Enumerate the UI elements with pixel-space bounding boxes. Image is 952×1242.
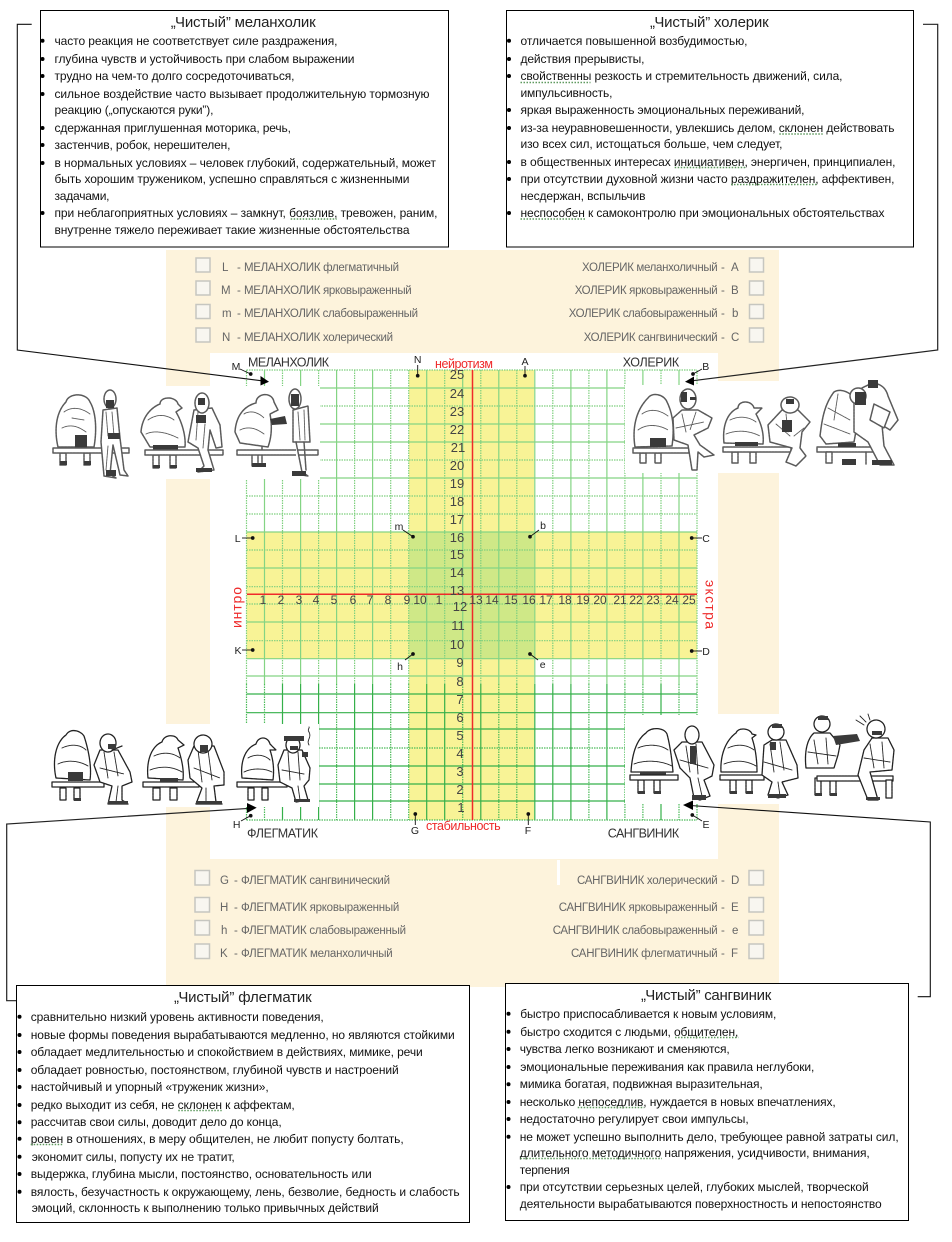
green overlap square [409, 532, 534, 659]
melancholic trait list [40, 34, 438, 237]
sanguine trait list: деятельности вырабатываются поверхностность и непостоянство [520, 1197, 882, 1211]
legend: choleric types: ХОЛЕРИК слабовыраженный [569, 308, 718, 320]
white cut-out behind illustrations, bottom right [625, 714, 900, 804]
chart point letters: N [414, 354, 421, 366]
phlegmatic trait list: эмоций, склонность к выполнению только привычных действий [32, 1201, 379, 1215]
legend: choleric types: - [721, 332, 725, 344]
legend: melancholic types: МЕЛАНХОЛИК ярковыраженный [244, 285, 412, 297]
quadrant title: melancholic: МЕЛАНХОЛИК [248, 356, 330, 370]
red axis lines [247, 370, 697, 820]
melancholic trait list: часто реакция не соответствует силе раздражения, [54, 34, 338, 48]
vertical scale numbers: 20 [450, 458, 464, 473]
legend: sanguine types: F [731, 948, 738, 960]
vertical scale numbers: 14 [450, 565, 464, 580]
choleric trait list: изо всех сил, истощаться больше, чем следует, [520, 137, 782, 151]
sanguine trait list: быстро сходится с людьми, общителен, [520, 1025, 738, 1039]
legend: phlegmatic types: ФЛЕГМАТИК сангвинический [241, 875, 390, 887]
sanguine trait list: мимика богатая, подвижная выразительная, [520, 1077, 763, 1091]
vertical scale numbers: 3 [456, 764, 464, 779]
legend: melancholic types: - [237, 332, 241, 344]
sanguine trait list: длительного методичного напряжения, усидчивости, внимания, [520, 1146, 870, 1160]
horizontal scale numbers: 2 [278, 593, 285, 607]
legend: sanguine types [553, 870, 764, 960]
beige backdrop panel [166, 250, 779, 987]
illustration: melancholic, scene 2 [141, 393, 223, 472]
horizontal scale numbers: 21 [613, 593, 627, 607]
chart point letters: E [702, 819, 710, 831]
legend: sanguine types: e [732, 925, 738, 937]
phlegmatic trait list: выдержка, глубина мысли, постоянство, основательность или [31, 1167, 372, 1181]
white chart panel [210, 353, 718, 859]
legend: sanguine types: САНГВИНИК холерический [577, 875, 718, 887]
chart point markers [240, 365, 702, 825]
legend: sanguine types: САНГВИНИК ярковыраженный [559, 902, 718, 914]
temperament chart grid [246, 370, 697, 820]
legend: choleric types: - [721, 308, 725, 320]
illustration: melancholic, scene 1 [53, 390, 129, 478]
horizontal scale numbers: 7 [367, 593, 374, 607]
heading: melancholic: „Чистый” меланхолик [171, 14, 316, 31]
vertical scale numbers: 11 [451, 618, 465, 633]
vertical scale numbers: 19 [450, 476, 464, 491]
legend: sanguine types: E [731, 902, 739, 914]
horizontal scale numbers: 4 [313, 593, 320, 607]
melancholic trait list: быть хорошим тружеником, успешно справляться с жизненными [54, 172, 410, 186]
chart point letters: L [235, 533, 241, 545]
choleric trait list: неспособен к самоконтролю при эмоциональных обстоятельствах [520, 206, 884, 220]
melancholic trait list: застенчив, робок, нерешителен, [54, 138, 230, 152]
illustration: sanguine, scene 12 [805, 714, 894, 800]
axis label: extra: экстра [702, 580, 718, 629]
vertical scale numbers: 5 [456, 728, 464, 743]
legend: sanguine types: - [721, 875, 725, 887]
illustration: phlegmatic, scene 9 [237, 727, 310, 802]
vertical scale numbers: 16 [450, 530, 464, 545]
legend: choleric types: C [731, 332, 739, 344]
chart point letters: D [702, 646, 710, 658]
melancholic trait list: сильное воздействие часто вызывает продолжительную тормозную [54, 87, 430, 101]
illustration: melancholic, scene 3 [235, 389, 318, 476]
horizontal scale numbers: 13 [469, 593, 483, 607]
illustration: choleric, scene 4 [633, 389, 714, 470]
vertical scale numbers [450, 367, 467, 815]
white cut-out behind illustrations, top left [50, 386, 320, 479]
legend: melancholic types: m [222, 308, 232, 320]
horizontal scale numbers: 18 [558, 593, 572, 607]
legend: sanguine types: D [731, 875, 739, 887]
legend: choleric types: ХОЛЕРИК сангвинический [584, 332, 718, 344]
sanguine trait list [506, 1007, 899, 1211]
legend: choleric types: b [732, 308, 738, 320]
legend: sanguine types: САНГВИНИК флегматичный [571, 948, 718, 960]
arrow: sanguine box to chart [683, 800, 930, 997]
vertical scale numbers: 10 [450, 637, 464, 652]
vertical scale numbers: 24 [450, 386, 464, 401]
melancholic trait list: в нормальных условиях – человек глубокий, содержательный, может [54, 156, 436, 170]
legend: melancholic types: L [222, 262, 229, 274]
illustration: sanguine, scene 10 [630, 726, 714, 800]
legend: phlegmatic types [195, 870, 406, 960]
legend: melancholic types: - [237, 308, 241, 320]
yellow vertical band [409, 370, 534, 820]
quadrant title: phlegmatic: ФЛЕГМАТИК [247, 826, 319, 840]
axis label: stability: стабильность [426, 819, 501, 833]
sanguine trait list: несколько непоседлив, нуждается в новых впечатлениях, [520, 1095, 836, 1109]
melancholic trait list: при неблагоприятных условиях – замкнут, боязлив, тревожен, раним, [54, 206, 438, 220]
legend: sanguine types: - [721, 925, 725, 937]
arrow: phlegmatic box to chart [7, 803, 257, 1001]
vertical scale numbers: 13 [450, 583, 464, 598]
chart point letters: G [411, 825, 419, 837]
legend: sanguine types: - [721, 948, 725, 960]
legend: melancholic types: - [237, 285, 241, 297]
phlegmatic trait list: обладает медлительностью и спокойствием в действиях, мимике, речи [31, 1045, 423, 1059]
melancholic trait list: внутренне тяжело переживает такие жизненные обстоятельства [54, 223, 410, 237]
choleric trait list: яркая выраженность эмоциональных переживаний, [520, 103, 804, 117]
vertical scale numbers: 6 [456, 710, 464, 725]
illustration: phlegmatic, scene 7 [52, 731, 132, 804]
sanguine trait list: чувства легко возникают и сменяются, [520, 1042, 730, 1056]
vertical scale numbers: 4 [456, 746, 464, 761]
chart point letters: h [397, 661, 403, 673]
legend: choleric types: - [721, 262, 725, 274]
horizontal scale numbers [260, 593, 696, 607]
vertical scale numbers: 7 [456, 692, 464, 707]
legend: phlegmatic types: ФЛЕГМАТИК слабовыраженный [241, 925, 406, 937]
horizontal scale numbers: 17 [539, 593, 553, 607]
illustration: phlegmatic, scene 8 [143, 735, 224, 804]
vertical scale numbers: 22 [450, 422, 464, 437]
horizontal scale numbers: 24 [665, 593, 679, 607]
chart point letters: F [525, 825, 531, 837]
legend: phlegmatic types: - [234, 875, 238, 887]
panel: pure choleric [506, 10, 914, 247]
horizontal scale numbers: 25 [682, 593, 696, 607]
vertical scale numbers: 17 [450, 512, 464, 527]
vertical scale numbers: 1 [457, 800, 465, 815]
horizontal scale numbers: 15 [504, 593, 518, 607]
illustration: choleric, scene 6 [817, 380, 898, 465]
choleric trait list: из-за неуравновешенности, увлекшись делом, склонен действовать [520, 121, 894, 135]
phlegmatic trait list: настойчивый и упорный «труженик жизни», [31, 1080, 269, 1094]
sanguine trait list: при отсутствии серьезных целей, глубоких мыслей, творческой [520, 1180, 869, 1194]
panel: pure sanguine [506, 984, 908, 1220]
chart point letters: M [232, 361, 240, 373]
vertical scale numbers: 25 [450, 367, 464, 382]
legend: phlegmatic types: h [221, 925, 227, 937]
vertical scale numbers: 9 [456, 655, 464, 670]
sanguine trait list: эмоциональные переживания как правила неглубоки, [520, 1060, 814, 1074]
choleric trait list: в общественных интересах инициативен, энергичен, принципиален, [520, 155, 896, 169]
legend: phlegmatic types: - [234, 925, 238, 937]
axis label: intro: интро [228, 587, 244, 628]
quadrant title: sanguine: САНГВИНИК [608, 826, 680, 840]
horizontal scale numbers: 14 [485, 593, 499, 607]
legend: melancholic types: M [221, 285, 231, 297]
phlegmatic trait list: редко выходит из себя, не склонен к аффектам, [31, 1098, 295, 1112]
axis label: neuroticism: нейротизм [435, 357, 493, 371]
choleric trait list: несдержан, вспыльчив [520, 189, 646, 203]
phlegmatic trait list: рассчитав свои силы, доводит дело до конца, [31, 1115, 282, 1129]
horizontal scale numbers: 23 [646, 593, 660, 607]
phlegmatic trait list: вялость, безучастность к окружающему, лень, безволие, бедность и слабость [31, 1185, 460, 1199]
horizontal scale numbers: 1 [436, 593, 443, 607]
chart point letters: H [233, 819, 240, 831]
vertical scale numbers: 15 [450, 547, 464, 562]
illustration: choleric, scene 5 [723, 397, 810, 466]
legend: phlegmatic types: G [220, 875, 229, 887]
horizontal scale numbers: 6 [350, 593, 357, 607]
white cut-out behind illustrations, bottom left [45, 724, 319, 807]
legend: choleric types [569, 258, 764, 344]
chart point letters: C [702, 533, 710, 545]
chart point letters: e [540, 659, 546, 671]
horizontal scale numbers: 22 [629, 593, 643, 607]
sanguine trait list: быстро приспосабливается к новым условиям, [520, 1007, 776, 1021]
legend: melancholic types: - [237, 262, 241, 274]
phlegmatic trait list [18, 1010, 460, 1215]
horizontal scale numbers: 10 [413, 593, 427, 607]
horizontal scale numbers: 19 [576, 593, 590, 607]
arrow: choleric box to chart [685, 24, 938, 386]
illustration: sanguine, scene 11 [720, 724, 798, 798]
heading: choleric: „Чистый” холерик [650, 14, 769, 31]
melancholic trait list: трудно на чем-то долго сосредоточиваться, [54, 69, 294, 83]
melancholic trait list: реакцию („опускаются руки”), [54, 103, 214, 117]
chart point letters: A [521, 356, 529, 368]
phlegmatic trait list: новые формы поведения вырабатываются медленно, но являются стойкими [31, 1028, 455, 1042]
heading: sanguine: „Чистый” сангвиник [641, 987, 772, 1004]
melancholic trait list: сдержанная приглушенная моторика, речь, [54, 121, 291, 135]
horizontal scale numbers: 8 [385, 593, 392, 607]
chart point letters: B [702, 361, 709, 373]
phlegmatic trait list: сравнительно низкий уровень активности поведения, [31, 1010, 324, 1024]
legend: melancholic types: МЕЛАНХОЛИК слабовыраженный [244, 308, 418, 320]
melancholic trait list: задачами, [54, 189, 110, 203]
sanguine trait list: недостаточно регулирует свои импульсы, [520, 1112, 749, 1126]
chart point letters: m [395, 521, 404, 533]
horizontal scale numbers: 16 [522, 593, 536, 607]
phlegmatic trait list: обладает ровностью, постоянством, глубиной чувств и настроений [31, 1063, 399, 1077]
legend: melancholic types: МЕЛАНХОЛИК холерический [244, 332, 393, 344]
panel: pure melancholic [40, 10, 448, 247]
heading: phlegmatic: „Чистый” флегматик [174, 989, 312, 1006]
horizontal scale numbers: 9 [404, 593, 411, 607]
horizontal scale numbers: 1 [260, 593, 267, 607]
legend: choleric types: - [721, 285, 725, 297]
panel: pure phlegmatic [16, 986, 470, 1222]
vertical scale numbers: 23 [450, 404, 464, 419]
chart point letters: K [234, 645, 242, 657]
choleric trait list: действия прерывисты, [520, 52, 644, 66]
phlegmatic trait list: экономит силы, попусту их не тратит, [32, 1150, 235, 1164]
sanguine trait list: терпения [520, 1163, 570, 1177]
legend: phlegmatic types: ФЛЕГМАТИК меланхоличный [241, 948, 393, 960]
vertical scale numbers: 18 [450, 494, 464, 509]
vertical scale numbers: 8 [456, 674, 464, 689]
choleric trait list: импульсивность, [520, 86, 612, 100]
horizontal scale numbers: 20 [593, 593, 607, 607]
legend: choleric types: ХОЛЕРИК ярковыраженный [575, 285, 718, 297]
legend: phlegmatic types: ФЛЕГМАТИК ярковыраженный [241, 902, 399, 914]
phlegmatic trait list: ровен в отношениях, в меру общителен, не любит попусту болтать, [31, 1132, 404, 1146]
choleric trait list [507, 34, 896, 220]
choleric trait list: при отсутствии духовной жизни часто раздражителен, аффективен, [520, 172, 894, 186]
chart point letters [232, 354, 710, 837]
legend: choleric types: A [731, 262, 739, 274]
arrow: melancholic box to chart [17, 24, 269, 386]
legend: melancholic types: МЕЛАНХОЛИК флегматичный [244, 262, 399, 274]
horizontal scale numbers: 5 [331, 593, 338, 607]
legend: phlegmatic types: - [234, 902, 238, 914]
legend: choleric types: ХОЛЕРИК меланхоличный [582, 262, 718, 274]
vertical scale numbers: 12 [453, 599, 467, 614]
sanguine trait list: не может успешно выполнить дело, требующее равной затраты сил, [520, 1130, 899, 1144]
yellow horizontal band [246, 532, 697, 659]
choleric trait list: отличается повышенной возбудимостью, [520, 34, 748, 48]
vertical scale numbers: 21 [451, 440, 465, 455]
legend: choleric types: B [731, 285, 739, 297]
quadrant title: choleric: ХОЛЕРИК [623, 356, 680, 370]
legend: phlegmatic types: H [220, 902, 228, 914]
horizontal scale numbers: 3 [296, 593, 303, 607]
legend: melancholic types: N [222, 332, 230, 344]
vertical scale numbers: 2 [456, 782, 464, 797]
melancholic trait list: глубина чувств и устойчивость при слабом выражении [54, 52, 354, 66]
white cut-out behind illustrations, top right [625, 381, 900, 473]
legend: sanguine types: САНГВИНИК слабовыраженный [553, 925, 718, 937]
legend: melancholic types [196, 258, 418, 344]
legend: phlegmatic types: - [234, 948, 238, 960]
chart point letters: b [540, 520, 546, 532]
legend: phlegmatic types: K [220, 948, 228, 960]
choleric trait list: свойственны резкость и стремительность движений, сила, [520, 69, 842, 83]
legend: sanguine types: - [721, 902, 725, 914]
